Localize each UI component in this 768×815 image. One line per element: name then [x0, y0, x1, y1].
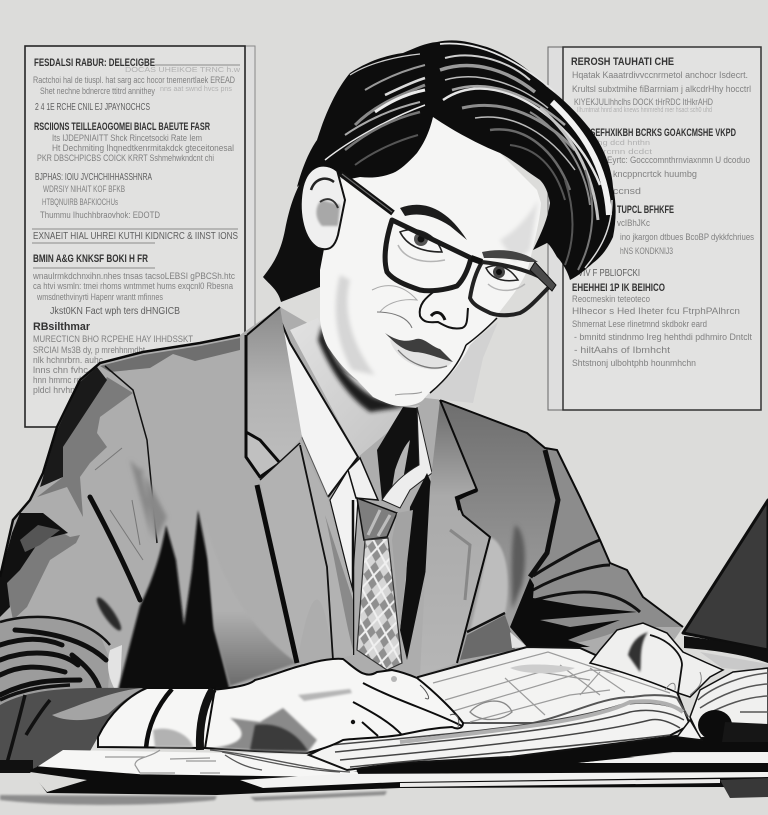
panel: right poster: ccnsd [613, 186, 641, 196]
panel: left poster: lnns chn fvhc [33, 365, 89, 375]
hair [297, 40, 616, 280]
hand shadows [213, 708, 317, 753]
panel: right poster: vcIBhJKc [617, 218, 650, 228]
light neck beyond jaw [425, 322, 498, 403]
panel: left poster: DOCAS UHEIKOE TRNC h.w [125, 67, 241, 74]
left hand and cuff [98, 659, 463, 753]
cuff [98, 688, 215, 748]
panel: right poster: hnrcmn dcdct [592, 149, 652, 156]
neck shadow [318, 325, 405, 412]
panel: right poster: - bmnitd stindnmo Ireg hehthdi pdhmiro Dntclt [574, 332, 752, 342]
panel: left poster: Ht Dechmiting Ihqnedtkenrmitakdck gteceitonesal [52, 143, 234, 153]
finger lines [353, 683, 462, 736]
panel: left poster: wnaulrmkdchnxihn.nhes tnsas tacsoLEBSI gPBCSh.htc [32, 271, 235, 281]
elbow shading [7, 520, 80, 620]
panel: left poster: Ractchoi hal de tiuspl. hat sarg acc hocor tnemenrtlaek EREAD [33, 75, 235, 85]
panel: left poster: WDRSIY NIHAIT KOF BFKB [43, 184, 125, 194]
panel: right poster: EHEHHEI 1P IK BEIHICO [572, 282, 665, 294]
panel: left poster: MURECTICN BHO RCPEHE HAY IHHDSSKT [33, 334, 193, 344]
book underside [353, 735, 768, 772]
black book gutter [698, 710, 732, 740]
shirt and collar [277, 312, 498, 588]
neck [290, 318, 420, 457]
right collar [382, 407, 432, 508]
panel: left poster: Jkst0KN Fact wph ters dHNGICB [50, 306, 180, 317]
panel: right poster: VIV F PBLIOFCKI [578, 268, 640, 279]
shoulder black wedge [40, 367, 107, 487]
panel: right poster: Iahg dcd hnthn [590, 140, 650, 147]
panel: right poster: Shmernat Lese rlinetmnd skdbokr eard [572, 319, 707, 329]
panel: right poster: Eyrtc: Gocccomnthrnviaxnmn U dcoduo [607, 155, 750, 165]
panel: left poster: hnn hmrnc rd [33, 375, 81, 385]
laptop [683, 500, 768, 672]
right hand [590, 623, 723, 697]
right eye [486, 266, 525, 290]
right sleeve [510, 448, 683, 647]
page block [309, 647, 690, 770]
hair mass [297, 40, 616, 280]
shoulder mid gray [37, 377, 133, 517]
panel: left poster: RSCIIONS TEILLEAOGOMEI BIACL BAEUTE FASR [34, 121, 210, 133]
right page [690, 668, 768, 738]
panel: right poster: Reocmeskin teteoteco [572, 294, 650, 304]
panel: left poster: BJPHAS: IOIU JVCHCHIHHASSHNRA [35, 172, 152, 183]
shoulder band [100, 338, 240, 372]
black under chin [377, 407, 420, 500]
jacket base [0, 307, 683, 773]
left collar [277, 318, 358, 497]
panel: right poster: - hiltAahs of Ibmhcht [574, 345, 671, 355]
panel: left poster: EXNAEIT HIAL UHREI KUTHI KIDNICRC & IINST IONS [33, 231, 238, 242]
panel: right poster: REROSH TAUHATI CHE [571, 56, 674, 68]
panel: left poster: RBsilthmar [33, 321, 91, 333]
panel: left poster: SRCIAI Ms3B dy, p mrehhnmdht [33, 345, 145, 355]
panel: left poster: 2 4 1E RCHE CNIL EJ JPAYNOCHCS [35, 102, 150, 113]
open book [309, 647, 768, 772]
pocket [467, 613, 505, 632]
shirt front [330, 470, 358, 588]
hair back [263, 165, 345, 302]
black band beside tie [400, 473, 433, 660]
panel: left poster: HTBQNUIRB BAFKIOCHUs [42, 197, 118, 207]
panel: right poster [548, 47, 761, 410]
page edges [463, 695, 688, 723]
panel: left poster: pldcl hrvhn [33, 385, 75, 395]
jacket [0, 307, 683, 773]
panel: right poster: Shtstnonj ulbohtphb hounmhchn [572, 358, 696, 368]
left lapel [246, 307, 302, 463]
panel: right poster: Hlhecor s Hed Iheter fcu FtrphPAlhrcn [572, 306, 740, 316]
panel: right poster: TUPCL BFHKFE [617, 204, 674, 216]
right body [440, 400, 558, 672]
cheek contour [372, 286, 417, 312]
brows [400, 205, 467, 240]
panel: left poster: Its IJDEPNIAITT Shck Rincetsocki Rate Iem [52, 133, 202, 143]
ear [301, 166, 345, 249]
hand [205, 659, 463, 753]
panel: left poster: nns aat swnd hvcs pns [160, 86, 232, 93]
panel: right poster: Hqatak Kaaatrdivvccnrmetol anchocr Isdecrt. [572, 70, 748, 80]
left sleeve folds [0, 617, 110, 645]
panel: left poster: BMIN A&G KNKSF BOKI H FR [33, 253, 148, 265]
right lapel [420, 400, 490, 675]
papers on desk [30, 750, 768, 798]
panel: left poster: PKR DBSCHPICBS COICK KRRT Sshmehwkndcnt chi [37, 153, 214, 163]
lower lapel band [260, 443, 353, 663]
desk shadow [0, 791, 387, 805]
tie [353, 473, 433, 670]
panel: left poster: Shet nechne bdnercre ttitrd annithey [40, 86, 155, 96]
panel: left poster: FESDALSI RABUR: DELECIGBE [34, 57, 155, 69]
panel: right poster: kncppncrtck huumbg [613, 169, 697, 179]
panel: left poster [25, 46, 255, 427]
nose [420, 290, 468, 329]
left eye [398, 230, 445, 261]
panel: right poster: KIYEKJULIhhclhs DOCK tHrRDC ItHkrAHD [574, 97, 713, 107]
hair highlights right [440, 44, 555, 92]
panel: left poster: ca htvi wsmln: tmei rhoms wntmmet hums exqcnl0 Rbesna [33, 281, 233, 291]
chart sketch on page [433, 652, 670, 722]
glasses [340, 173, 556, 315]
skin [320, 117, 541, 406]
panel: right poster: Ilh.mtrnat hnrd and knews hmmrehd mer hsact sch0 uhd [577, 107, 712, 114]
hair highlights left [325, 105, 425, 160]
wrist bands [146, 689, 172, 748]
face [301, 117, 541, 412]
panel: left poster: wmsdnethvinyrti Hapenr wrantt mfinnes [36, 292, 163, 302]
panel: left poster: nlk hchnrbrn. auhc [33, 355, 103, 365]
underarm black [118, 510, 230, 690]
panel: right poster: hNS KONDKNIJ3 [620, 246, 673, 256]
collar knot piece [348, 458, 378, 500]
sleeve seam [105, 366, 157, 543]
panel: right poster: Krultsl subxtmihe fiBarrniam j alkcdrHhy hocctrl [572, 84, 751, 94]
mouth [385, 333, 453, 370]
panel: left poster: Thummu Ihuchhbraovhok: EDOTD [40, 210, 160, 220]
lapels [246, 307, 490, 675]
